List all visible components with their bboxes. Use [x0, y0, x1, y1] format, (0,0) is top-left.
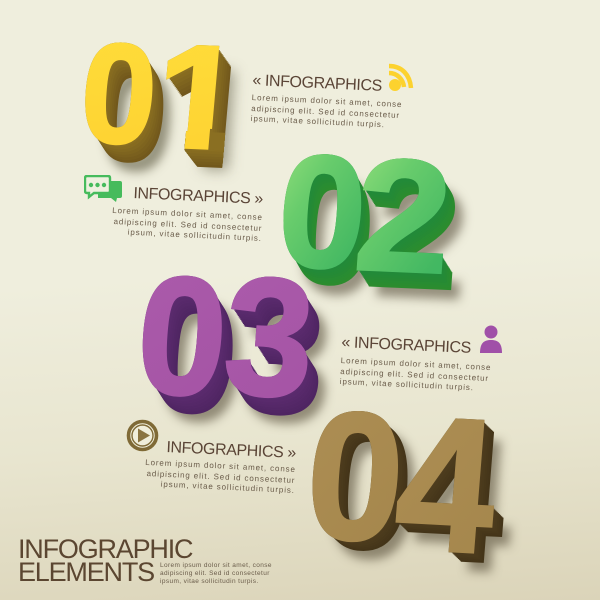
- number 03: 3: [219, 241, 320, 433]
- footer body text: Lorem ipsum dolor sit amet, conse: [160, 562, 272, 569]
- number 02: 2: [350, 124, 457, 307]
- icon: person: [480, 326, 502, 353]
- text block 4 body: ipsum, vitae sollicitudin turpis.: [161, 480, 295, 495]
- icon: rss: [389, 64, 414, 91]
- text block 2 heading: INFOGRAPHICS »: [133, 185, 263, 208]
- text block 4 body: adipiscing elit. Sed id consectetur: [146, 469, 296, 485]
- number 03: 0: [132, 240, 233, 432]
- text block 3 body: Lorem ipsum dolor sit amet, conse: [341, 356, 491, 372]
- title: INFOGRAPHIC: [18, 534, 192, 564]
- number 02: 0: [273, 120, 372, 303]
- number 01: 1: [148, 13, 250, 182]
- footer body text: [160, 562, 272, 585]
- number 04: 4: [389, 375, 504, 594]
- number 01: 0: [75, 13, 161, 175]
- text block 1 body: ipsum, vitae sollicitudin turpis.: [251, 114, 385, 129]
- number 03: 0: [132, 240, 233, 432]
- text block 2 body: [112, 206, 263, 243]
- text block 3 body: adipiscing elit. Sed id consectetur: [340, 367, 489, 383]
- text block 2 body: ipsum, vitae sollicitudin turpis.: [128, 228, 262, 243]
- text block 3 body: ipsum, vitae sollicitudin turpis.: [340, 377, 474, 392]
- icon: play: [126, 420, 158, 452]
- title: [18, 534, 192, 587]
- number 01: 1: [148, 13, 250, 182]
- number 02: 0: [273, 120, 372, 303]
- footer body text: ipsum, vitae sollicitudin turpis.: [160, 578, 259, 585]
- number 03: 3: [219, 241, 320, 433]
- text block 1 body: adipiscing elit. Sed id consectetur: [251, 104, 400, 120]
- number 04: 4: [389, 375, 504, 594]
- number 01: 0: [75, 13, 161, 175]
- text block 1 body: Lorem ipsum dolor sit amet, conse: [252, 93, 402, 109]
- text block 3 body: [340, 356, 491, 392]
- number 01: [85, 42, 242, 179]
- number 02: 2: [350, 124, 457, 307]
- text block 2 body: Lorem ipsum dolor sit amet, conse: [112, 206, 263, 222]
- number 04: 0: [300, 372, 411, 580]
- text block 4 body: [145, 458, 296, 495]
- text block 1 body: [251, 93, 402, 129]
- footer body text: adipiscing elit. Sed id consectetur: [160, 570, 270, 577]
- title: ELEMENTS: [18, 557, 154, 587]
- icon: chat bubbles: [84, 175, 122, 202]
- text block 4 heading: INFOGRAPHICS »: [166, 439, 296, 462]
- text block 4 body: Lorem ipsum dolor sit amet, conse: [145, 458, 296, 474]
- text block 3 heading: « INFOGRAPHICS: [341, 334, 471, 357]
- text block 1 heading: « INFOGRAPHICS: [252, 72, 382, 95]
- text block 2 body: adipiscing elit. Sed id consectetur: [113, 217, 263, 233]
- number 04: 0: [300, 372, 411, 580]
